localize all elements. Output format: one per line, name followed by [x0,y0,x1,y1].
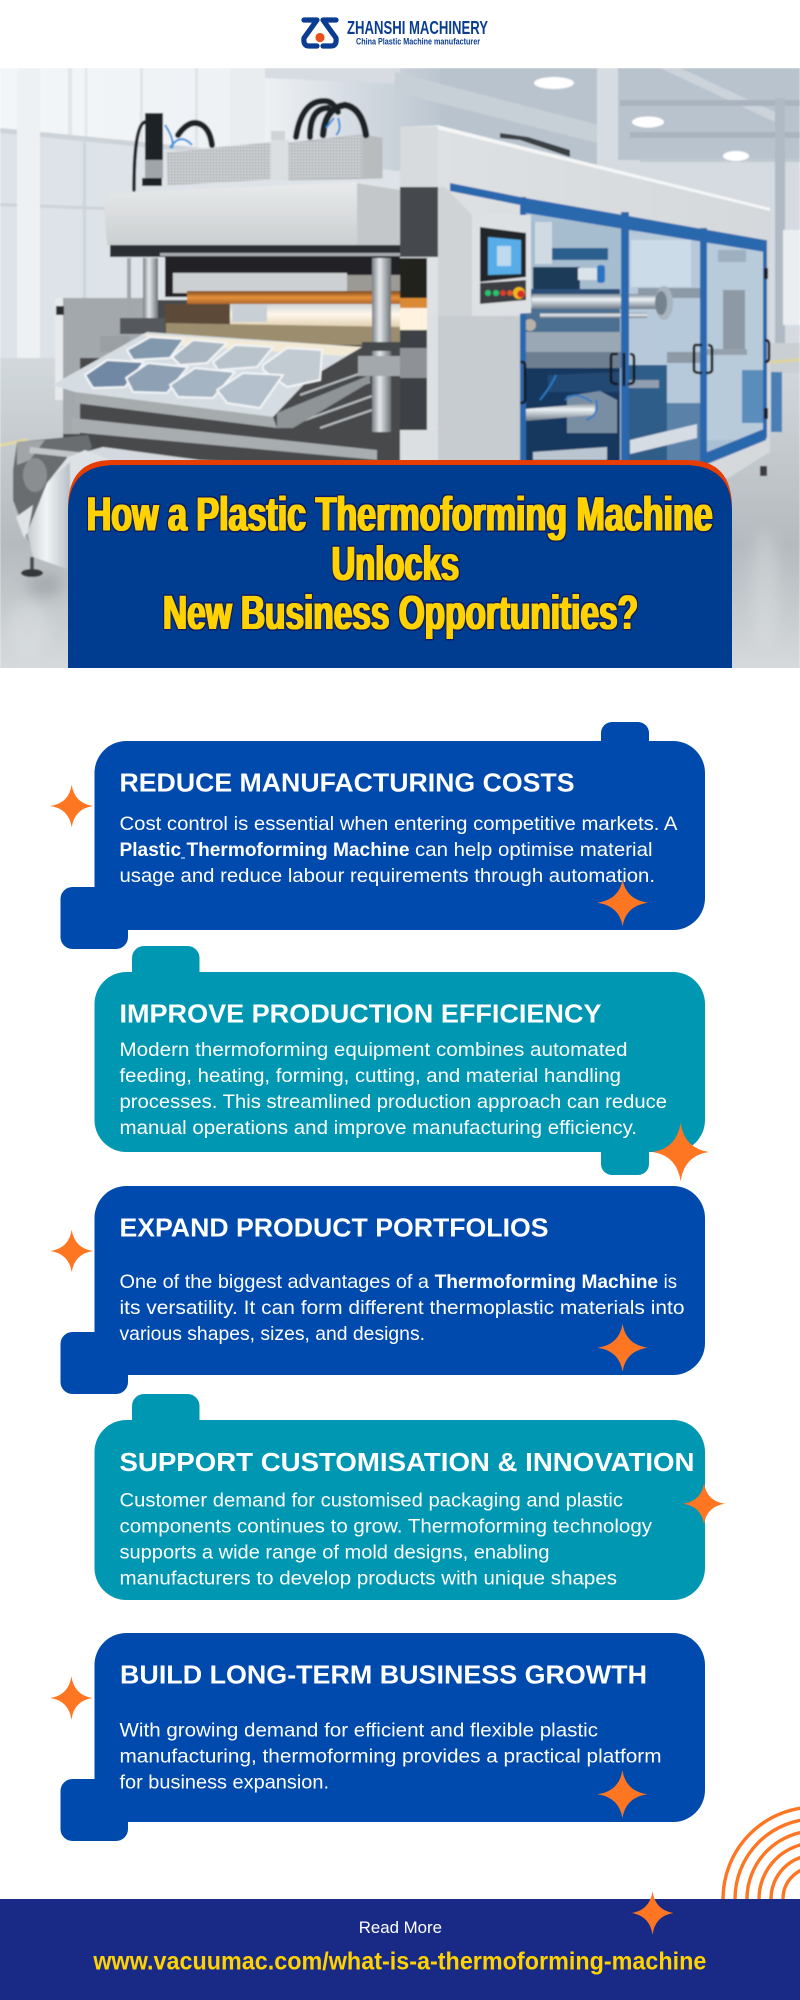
floor [0,358,800,670]
panel: expand product portfolios [50,1186,705,1394]
machine: formed plastic trays [52,332,377,460]
body text: processes. This streamlined production approach can reduce [120,1091,667,1113]
body text [120,1271,685,1345]
body text: Thermoforming Machine [435,1271,658,1293]
footer band [0,1891,800,2000]
icon: left sparkle [50,1230,93,1272]
body text [120,813,678,887]
body text: various shapes, sizes, and designs. [120,1323,425,1345]
body text: feeding, heating, forming, cutting, and material handling [120,1065,621,1087]
body text: Modern thermoforming equipment combines automated [120,1039,628,1061]
hero photo: thermoforming machine in a factory [0,68,800,670]
body text: Cost control is essential when entering competitive markets. A [120,813,678,835]
body text: for business expansion. [120,1772,329,1794]
heading: SUPPORT CUSTOMISATION & INNOVATION [120,1449,694,1477]
panel: reduce manufacturing costs [50,722,705,949]
icon: right sparkle [597,1770,647,1818]
icon: left sparkle [50,1676,92,1720]
title banner [68,460,732,668]
body text: components continues to grow. Thermoforming technology [120,1515,652,1537]
heading: EXPAND PRODUCT PORTFOLIOS [120,1215,548,1243]
machine: right cabinet [400,125,782,478]
left pane [526,222,620,294]
machine: forming press [55,257,400,470]
panel: improve production efficiency [94,946,709,1182]
icon: footer sparkle [632,1891,674,1935]
machine: film roll feed [13,435,240,577]
brand name: ZHANSHI MACHINERY [347,18,488,38]
banner heading: Unlocks [332,538,459,591]
body text: can help optimise material [415,839,652,861]
card shape [60,1186,705,1394]
machine: head box and heaters [104,101,400,257]
card shape [60,722,705,949]
footer background [0,1899,800,2000]
card shape [94,1394,705,1600]
body text: manual operations and improve manufacturing efficiency. [120,1117,637,1139]
banner heading [87,489,713,640]
body text: manufacturers to develop products with unique shapes [120,1567,617,1589]
body text [120,1489,652,1589]
blue frame [520,197,765,252]
icon: concentric orange arcs [723,1807,800,1991]
brand tagline: China Plastic Machine manufacturer [356,37,480,47]
banner panel [68,460,732,668]
card shape [60,1633,705,1841]
factory background [0,68,800,368]
body text: supports a wide range of mold designs, enabling [120,1541,550,1563]
body text: Customer demand for customised packaging and plastic [120,1489,623,1511]
icon: left sparkle [50,785,93,827]
body text: is [664,1271,677,1293]
body text: One of the biggest advantages of a [120,1271,429,1293]
body text: Plastic Thermoforming Machine [120,839,410,861]
logo: Zhanshi Machinery [304,18,488,47]
shared pipe [532,294,660,309]
icon: ZS monogram [304,20,336,46]
panel: build long-term business growth [50,1633,705,1841]
icon: sparkle [683,1483,725,1524]
card shape [94,946,705,1175]
body text: manufacturing, thermoforming provides a practical platform [120,1746,662,1768]
machine: control box [398,127,532,460]
body text [120,1039,667,1139]
heading: BUILD LONG-TERM BUSINESS GROWTH [120,1661,647,1689]
right pane [707,244,763,440]
icon: sparkle on card one [597,879,648,926]
heading: REDUCE MANUFACTURING COSTS [120,770,574,798]
icon: right sparkle [598,1324,648,1372]
body text: With growing demand for efficient and flexible plastic [120,1720,598,1742]
heading: IMPROVE PRODUCTION EFFICIENCY [120,1001,602,1029]
body text [120,1720,662,1794]
body text: its versatility. It can form different thermoplastic materials into [120,1297,685,1319]
icon: sparkle [653,1122,709,1182]
middle pane [628,232,700,403]
website url: www.vacuumac.com/what-is-a-thermoforming-machine [92,1947,706,1975]
body text: usage and reduce labour requirements through automation. [120,865,655,887]
read more label: Read More [359,1918,442,1937]
panel: support customisation and innovation [94,1394,725,1600]
